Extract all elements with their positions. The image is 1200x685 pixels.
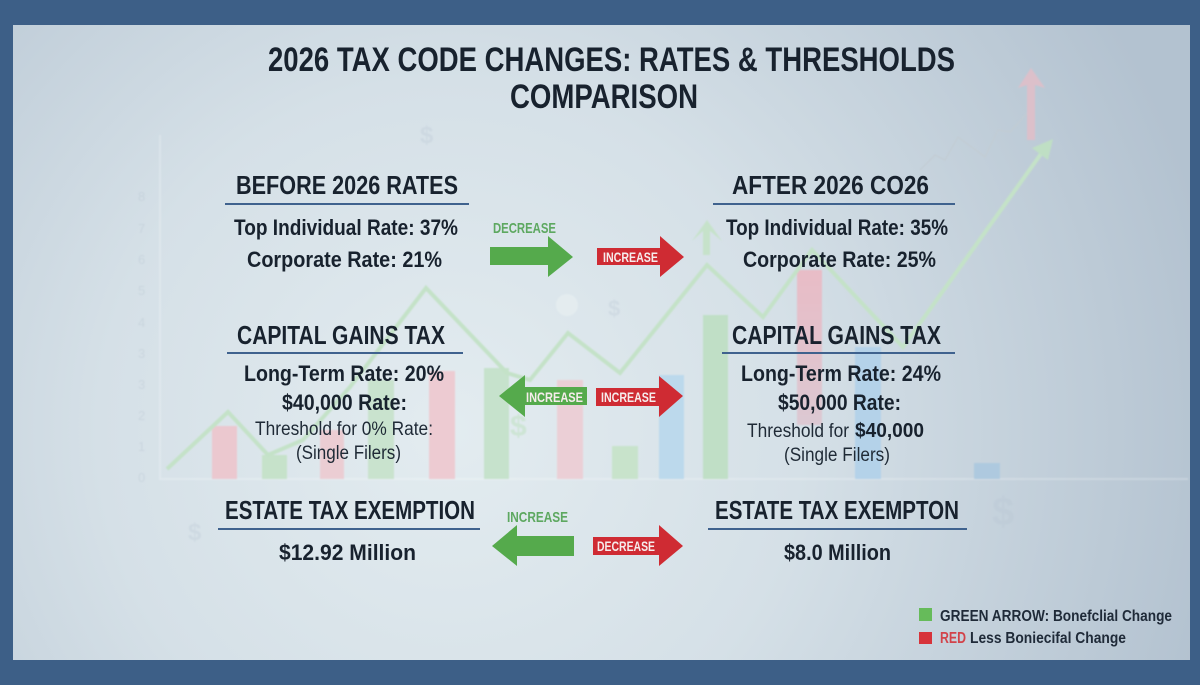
arrow: decrease red right estate: DECREASE: [597, 538, 655, 554]
corporate rate after: Corporate Rate: 25%: [743, 247, 936, 272]
panel: capital gains after: [722, 320, 955, 466]
heading: before 2026 rates: BEFORE 2026 RATES: [236, 170, 458, 200]
arrow: decrease red right estate: [593, 525, 683, 566]
exemption amount after: $8.0 Million: [784, 540, 891, 565]
faint dollar signs: $: [188, 519, 202, 546]
long-term rate after: Long-Term Rate: 24%: [741, 361, 941, 386]
axis numbers: 4: [138, 315, 145, 330]
heading: after 2026: AFTER 2026 CO26: [732, 170, 929, 200]
panel: estate tax after: [708, 495, 967, 565]
faint dollar signs: $: [992, 490, 1014, 534]
heading: capital gains tax: CAPITAL GAINS TAX: [732, 320, 942, 350]
trend line: [167, 144, 1048, 469]
arrow: increase green left estate: [492, 509, 574, 566]
arrow: increase red right: INCREASE: [603, 249, 658, 265]
single filers after: (Single Filers): [784, 445, 890, 466]
title: 2026 TAX CODE CHANGES: RATES & THRESHOLDS: [268, 41, 955, 79]
arrow: increase red right: [597, 236, 684, 277]
axis numbers: 1: [138, 439, 145, 454]
faint thin line: [920, 110, 1030, 170]
arrow: increase red right capital gains: INCREASE: [601, 389, 656, 405]
legend: red: RED: [940, 630, 966, 647]
arrow: increase green left: [499, 375, 587, 417]
axis numbers: 7: [138, 221, 145, 236]
arrow: decrease green right: [490, 220, 573, 277]
threshold before: Threshold for 0% Rate:: [255, 419, 433, 440]
arrow: decrease green right: DECREASE: [493, 220, 556, 237]
axis numbers: 8: [138, 189, 145, 204]
faint green up arrow: [692, 220, 722, 255]
rate amount before: $40,000 Rate:: [282, 390, 407, 415]
axis numbers: 0: [138, 470, 145, 485]
legend: red: Less Boniecifal Change: [970, 630, 1126, 647]
panel: before 2026 rates: [225, 170, 469, 272]
panel: capital gains before: [227, 320, 463, 464]
title: COMPARISON: [510, 78, 698, 116]
arrow: increase green left: INCREASE: [526, 389, 583, 405]
top individual rate after: Top Individual Rate: 35%: [726, 215, 948, 240]
panel: estate tax before: [218, 495, 480, 565]
background chart: [138, 68, 1188, 546]
faint red up arrow: [1018, 68, 1045, 140]
chart bars: [212, 270, 1000, 479]
rate amount after: $50,000 Rate:: [778, 390, 901, 415]
threshold after: Threshold for: [747, 421, 850, 442]
single filers before: (Single Filers): [296, 443, 401, 464]
top individual rate before: Top Individual Rate: 37%: [234, 215, 458, 240]
exemption amount before: $12.92 Million: [279, 540, 416, 565]
axis numbers: 2: [138, 408, 145, 423]
legend: red: [919, 630, 1126, 647]
title: [268, 41, 955, 116]
long-term rate before: Long-Term Rate: 20%: [244, 361, 444, 386]
arrow: increase green left estate: INCREASE: [507, 509, 568, 526]
panel: after 2026 rates: [713, 170, 955, 272]
axis numbers: 3: [138, 346, 145, 361]
trend arrow head: [1032, 139, 1053, 160]
heading: capital gains tax: CAPITAL GAINS TAX: [237, 320, 446, 350]
faint dollar signs: $: [420, 122, 434, 149]
axis numbers: 5: [138, 283, 145, 298]
corporate rate before: Corporate Rate: 21%: [247, 247, 442, 272]
arrow: increase red right capital gains: [596, 376, 683, 417]
axis numbers: [138, 189, 145, 485]
heading: estate tax exemption: ESTATE TAX EXEMPTION: [225, 495, 475, 525]
faint dollar signs: $: [510, 410, 527, 443]
legend: [919, 608, 1172, 647]
threshold after: $40,000: [855, 420, 924, 442]
faint dollar signs: [188, 122, 1014, 546]
faint dollar signs: $: [608, 296, 620, 321]
chart axes: [160, 135, 1188, 479]
heading: estate tax exempton: ESTATE TAX EXEMPTON: [715, 495, 959, 525]
axis numbers: 6: [138, 252, 145, 267]
axis numbers: 3: [138, 377, 145, 392]
faint coin: [556, 294, 578, 316]
threshold after: [747, 420, 924, 442]
